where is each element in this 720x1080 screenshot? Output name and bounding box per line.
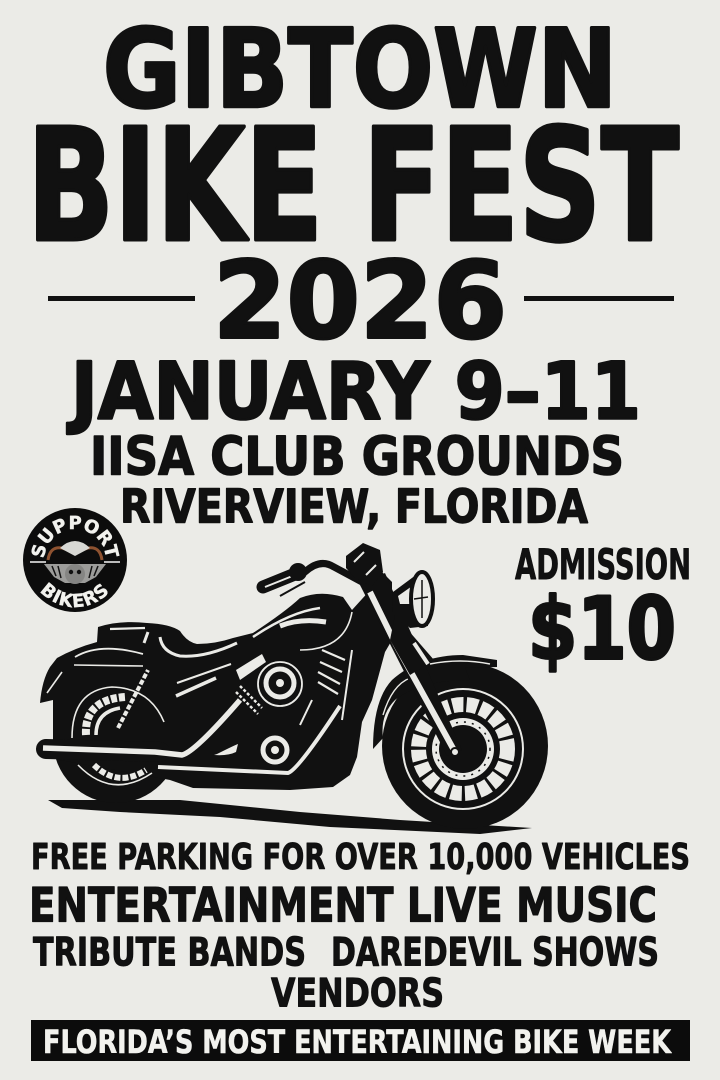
side panel highlights xyxy=(177,664,231,683)
badge: support bikers: SUPPORT xyxy=(31,516,120,558)
tank highlights xyxy=(253,608,320,637)
front fork xyxy=(360,573,462,756)
location: RIVERVIEW, FLORIDA xyxy=(120,480,588,534)
front fender xyxy=(373,655,497,749)
admission price: $10 xyxy=(528,580,676,680)
engine xyxy=(214,650,352,762)
year row xyxy=(48,240,674,362)
exhaust pipes xyxy=(43,700,340,773)
instrument cluster xyxy=(346,543,383,586)
motorcycle illustration xyxy=(40,543,548,834)
rear wheel details xyxy=(72,687,164,785)
badge: support bikers xyxy=(23,508,127,612)
handlebar xyxy=(263,563,362,596)
date: JANUARY 9–11 xyxy=(66,348,641,438)
badge: support bikers: BIKERS xyxy=(40,582,108,608)
rear shock xyxy=(118,670,148,728)
title: Gibtown: GIBTOWN xyxy=(103,8,617,132)
rear fender highlights xyxy=(75,649,143,657)
body silhouette xyxy=(40,572,392,790)
venue: IISA CLUB GROUNDS xyxy=(90,426,624,488)
ground shadow xyxy=(48,800,532,834)
feature line: vendors: VENDORS xyxy=(271,972,444,1016)
front wheel xyxy=(382,663,548,829)
seat highlight xyxy=(160,637,237,656)
feature line: tribute bands: TRIBUTE BANDS xyxy=(33,930,306,976)
headlight xyxy=(392,572,433,628)
rear wheel tire xyxy=(53,677,179,803)
year row: 2026 xyxy=(213,240,507,362)
